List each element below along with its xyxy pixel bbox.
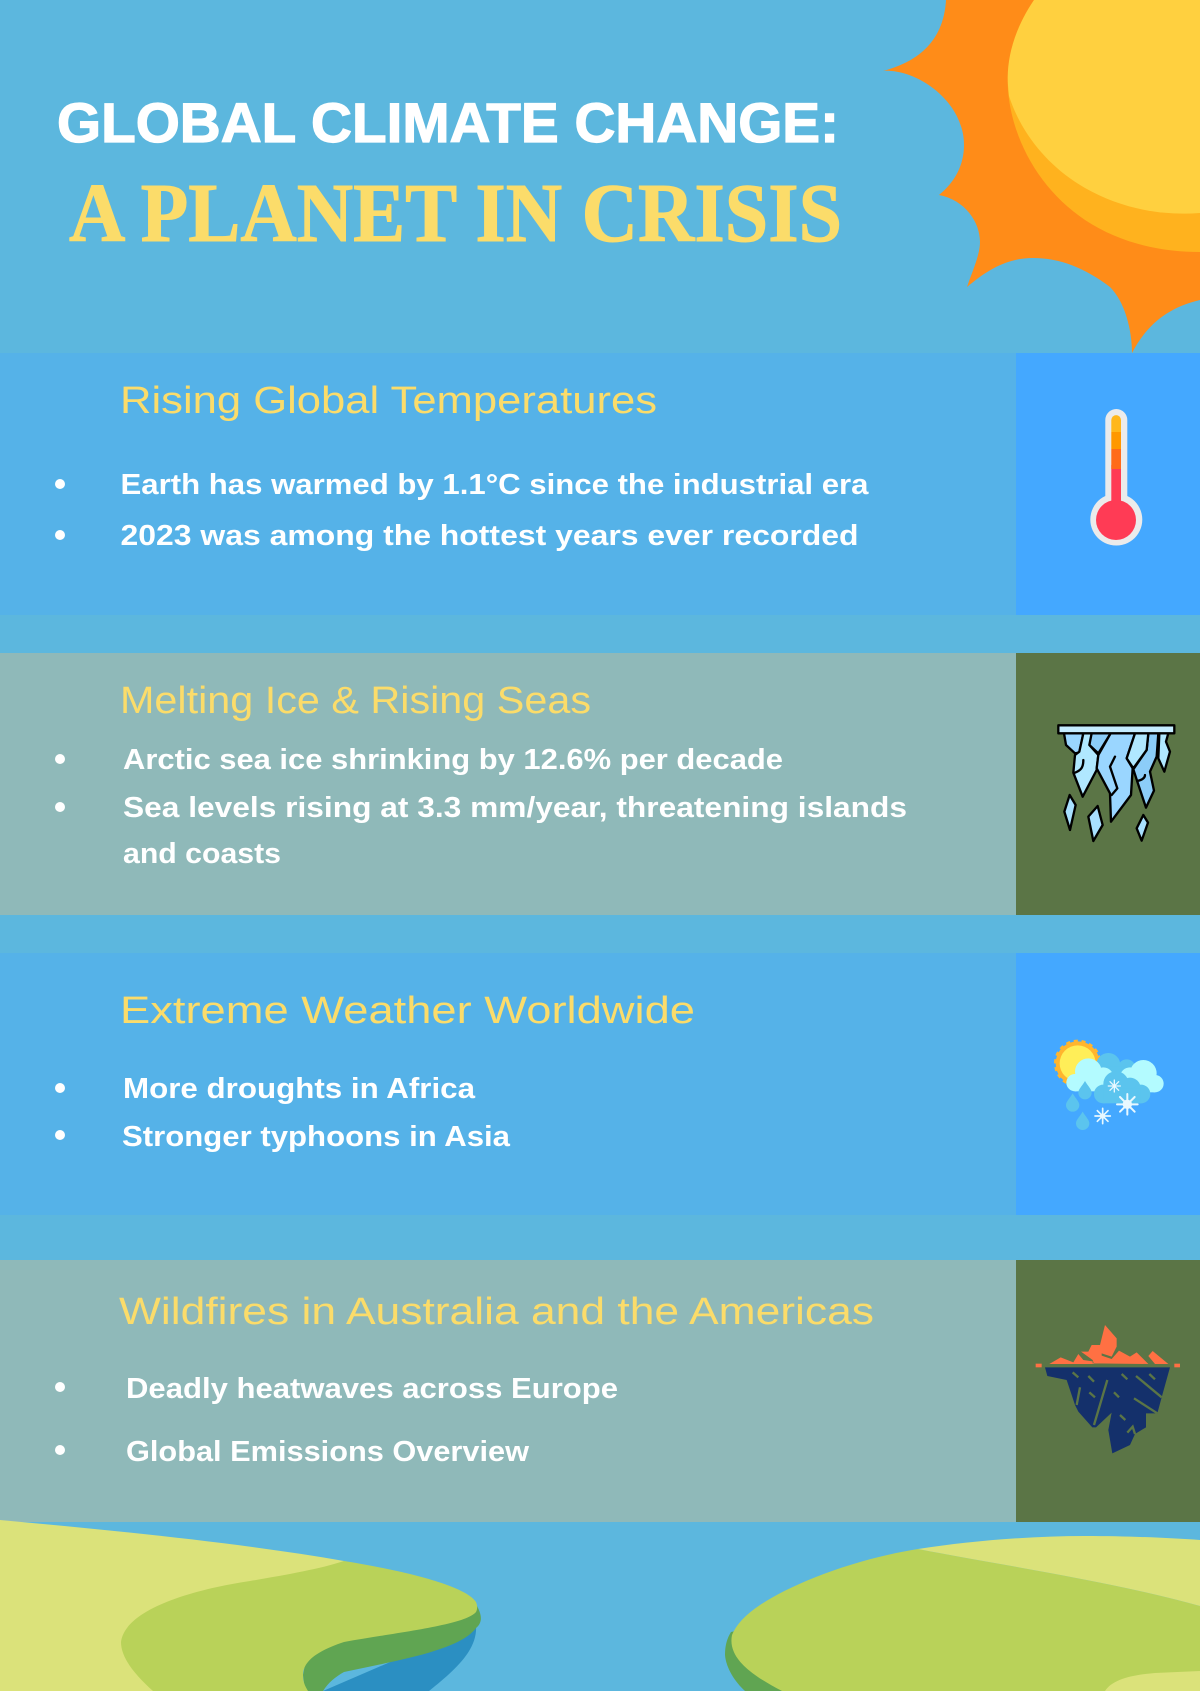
bullet 2	[55, 792, 907, 870]
heading: rising temperatures: Rising Global Temperatures	[120, 380, 657, 422]
icon: mixed weather	[1056, 1041, 1164, 1130]
landscape: left shore	[0, 1520, 481, 1691]
panel: melting ice and rising seas	[0, 653, 1200, 915]
heading: extreme weather: Extreme Weather Worldwide	[120, 990, 695, 1032]
bullet 1: More droughts in Africa	[123, 1073, 476, 1105]
bullet 2: 2023 was among the hottest years ever recorded	[120, 520, 859, 552]
bullet 1: Earth has warmed by 1.1°C since the industrial era	[120, 469, 869, 501]
title line 2: A PLANET IN CRISIS	[69, 167, 842, 260]
bullet 2: Sea levels rising at 3.3 mm/year, threatening islands	[123, 792, 907, 824]
bullet 2: Stronger typhoons in Asia	[122, 1121, 511, 1153]
panel: wildfires in australia and the americas	[0, 1260, 1200, 1522]
panel: rising global temperatures	[0, 353, 1200, 615]
landscape: right shore	[725, 1536, 1200, 1691]
bullet 1: Deadly heatwaves across Europe	[126, 1373, 618, 1405]
bullet 1: Arctic sea ice shrinking by 12.6% per decade	[123, 744, 783, 776]
title line 1: GLOBAL CLIMATE CHANGE:	[57, 91, 839, 154]
bullet 2: and coasts	[123, 838, 281, 870]
icon: icicles	[1058, 725, 1174, 841]
sun illustration	[883, 0, 1200, 353]
title	[57, 91, 842, 260]
icon: iceberg	[1036, 1325, 1180, 1453]
heading: melting ice: Melting Ice & Rising Seas	[120, 680, 591, 722]
bullet 2: Global Emissions Overview	[126, 1436, 529, 1468]
heading: wildfires: Wildfires in Australia and the Americas	[119, 1291, 874, 1333]
panel: extreme weather worldwide	[0, 953, 1200, 1215]
icon: thermometer	[1090, 409, 1142, 546]
